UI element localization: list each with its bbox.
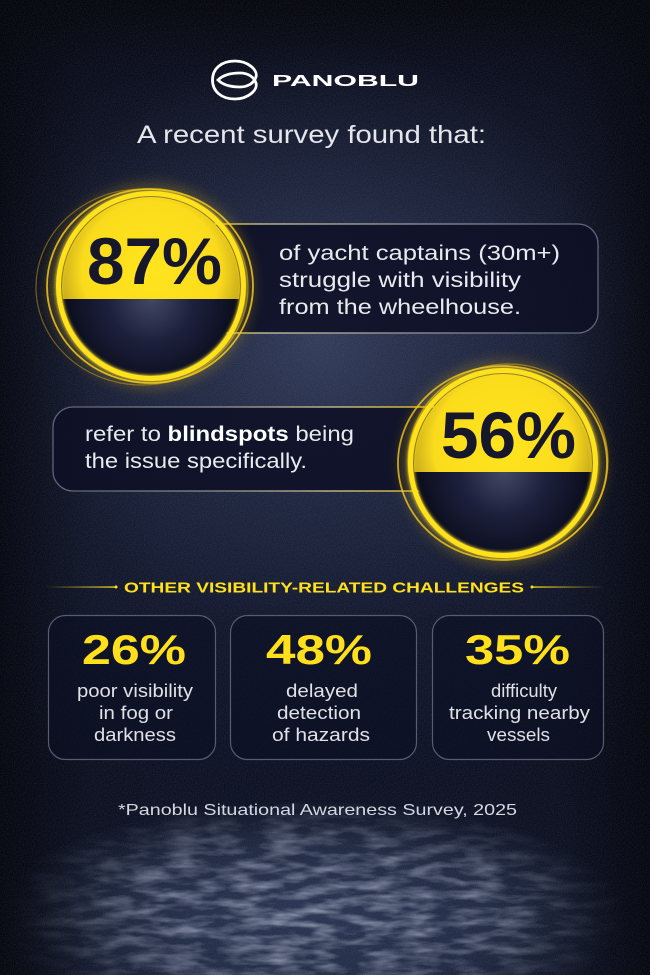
- footnote: *Panoblu Situational Awareness Survey, 2025: [118, 802, 517, 819]
- stat card: 35%: [432, 616, 604, 760]
- stat label: difficulty: [491, 681, 557, 701]
- stat label: delayed: [286, 681, 358, 701]
- callout text: from the wheelhouse.: [279, 295, 521, 319]
- panel: 56% callout: [53, 407, 473, 491]
- stat card: 48%: [230, 616, 416, 760]
- stat label: in fog or: [99, 703, 173, 723]
- stat value: 48%: [266, 626, 372, 673]
- heading text: OTHER VISIBILITY-RELATED CHALLENGES: [124, 580, 524, 596]
- value: 56%: [441, 398, 576, 472]
- callout text: of yacht captains (30m+): [279, 241, 560, 265]
- panel: 87% callout: [180, 224, 598, 333]
- stat label: poor visibility: [77, 681, 193, 701]
- wordmark: PANOBLU: [272, 73, 419, 90]
- callout text: the issue specifically.: [85, 449, 307, 473]
- dial: 56%: [398, 364, 608, 560]
- dial: 87%: [36, 189, 253, 385]
- callout text: struggle with visibility: [279, 268, 521, 292]
- value: 87%: [87, 224, 222, 298]
- stat label: of hazards: [272, 725, 370, 745]
- callout text: refer to blindspots being: [85, 422, 347, 446]
- stat label: vessels: [487, 725, 550, 745]
- logo: [212, 61, 419, 99]
- stat card: 26%: [48, 616, 216, 760]
- stat label: darkness: [94, 725, 176, 745]
- stat value: 35%: [465, 626, 570, 673]
- intro heading: A recent survey found that:: [137, 121, 486, 149]
- stat label: detection: [277, 703, 361, 723]
- icon: logo mark: [212, 61, 256, 99]
- stat label: tracking nearby: [449, 703, 590, 723]
- stat value: 26%: [82, 626, 186, 673]
- section heading: [45, 580, 605, 596]
